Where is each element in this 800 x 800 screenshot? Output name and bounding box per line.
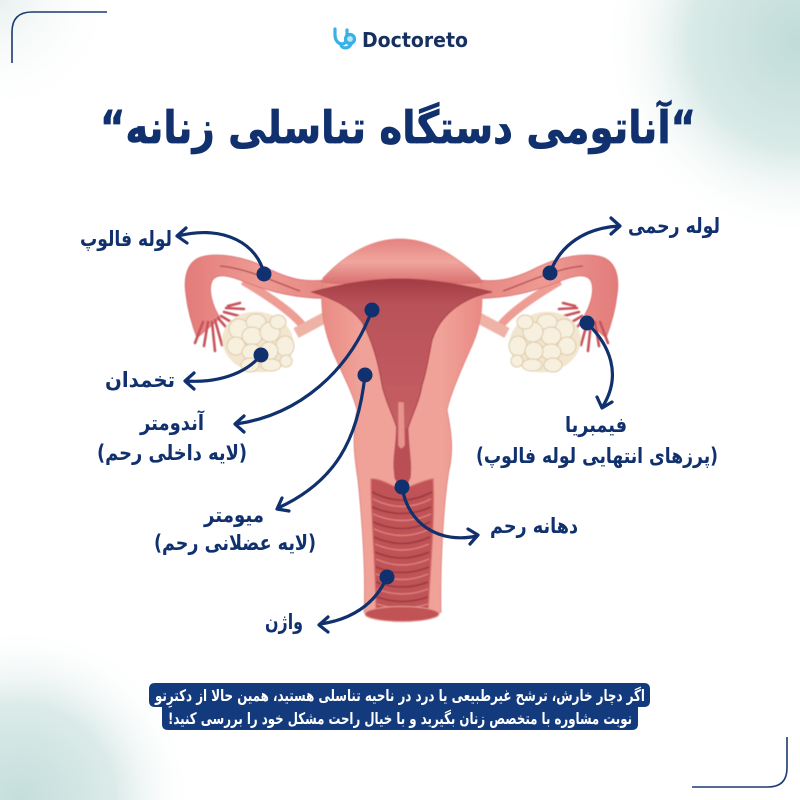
uterus and vagina outer wall xyxy=(322,239,482,622)
label: fallopian tube: لوله فالوپ xyxy=(80,227,172,251)
icon: stethoscope xyxy=(335,29,354,48)
label: endometrium: (لایه داخلی رحم) xyxy=(97,441,247,465)
arrow: fallopian tube left xyxy=(177,228,272,282)
label: endometrium xyxy=(97,410,247,465)
label: fimbria: فیمبریا xyxy=(565,413,627,437)
label: myometrium: (لایه عضلانی رحم) xyxy=(154,531,316,555)
arrow: myometrium xyxy=(277,368,372,511)
banner text: نوبت مشاوره با متخصص زنان بگیرید و با خیال راحت مشکل خود را بررسی کنید! xyxy=(168,709,632,728)
label: fimbria: (پرزهای انتهایی لوله فالوپ) xyxy=(476,444,718,468)
label: fimbria xyxy=(476,413,718,468)
label: endometrium: آندومتر xyxy=(139,410,205,435)
banner text: اگر دچار خارش، ترشح غیرطبیعی یا درد در ناحیه تناسلی هستید، همین حالا از دکترِتو xyxy=(154,686,645,708)
label: vagina: واژن xyxy=(265,610,303,634)
banner background xyxy=(149,683,650,730)
title: “آناتومی دستگاه تناسلی زنانه“ xyxy=(100,100,696,154)
arrow: cervix xyxy=(394,480,478,544)
logo: Doctoreto xyxy=(335,28,468,52)
fundus xyxy=(320,239,484,284)
banner text xyxy=(154,686,645,728)
corner frame top left xyxy=(12,12,107,63)
callout arrows and dots xyxy=(177,218,620,632)
callout banner xyxy=(149,683,650,730)
label: cervix: دهانه رحم xyxy=(490,514,578,538)
vaginal opening xyxy=(365,606,439,622)
label: uterine tube: لوله رحمی xyxy=(628,214,720,238)
wordmark: Doctoreto xyxy=(362,28,468,52)
label: myometrium xyxy=(154,503,316,555)
label: myometrium: میومتر xyxy=(203,503,264,527)
uterine cavity xyxy=(312,279,492,490)
right fallopian tube and ovary xyxy=(468,255,618,379)
arrow: endometrium xyxy=(235,302,380,432)
anatomy illustration xyxy=(185,239,618,622)
arrow: vagina xyxy=(319,570,394,632)
corner frame bottom right xyxy=(692,737,787,787)
left fallopian tube and ovary xyxy=(185,255,335,379)
arrow: uterine tube right xyxy=(542,218,620,280)
vaginal cavity xyxy=(371,479,433,612)
arrow: fimbria xyxy=(580,316,612,408)
cervical canal xyxy=(393,428,411,489)
cervix tongue xyxy=(398,402,405,448)
vaginal ridges xyxy=(372,492,432,608)
label: ovary: تخمدان xyxy=(105,368,175,392)
arrow: ovary xyxy=(185,348,268,389)
